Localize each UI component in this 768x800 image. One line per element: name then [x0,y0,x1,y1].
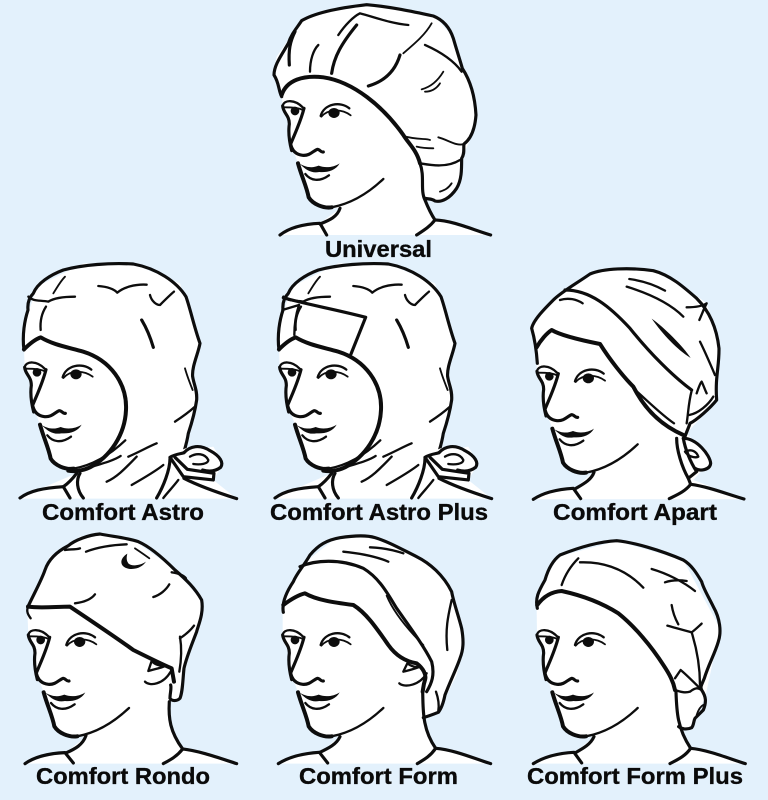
panel: Comfort Astro Plus [270,263,492,525]
illustration: Comfort Form Plus cap [533,541,745,764]
label: Universal: Universal [325,236,432,262]
panel: Comfort Form [278,536,491,789]
label: Comfort Apart: Comfort Apart [553,499,717,525]
label: Comfort Astro Plus: Comfort Astro Plus [270,499,488,525]
label: Comfort Form Plus: Comfort Form Plus [527,763,743,789]
panel: Universal [273,4,491,262]
panel: Comfort Apart [532,267,744,525]
illustration: Comfort Form cap [278,536,491,764]
illustration: Comfort Astro Plus hood with patch [275,263,492,499]
panel: Comfort Rondo [25,533,237,789]
label: Comfort Rondo: Comfort Rondo [36,763,210,789]
illustration: Universal bouffant cap [273,4,491,235]
illustration: Comfort Rondo cap [25,533,237,764]
illustration: Comfort Astro hood [20,263,237,499]
panel: Comfort Form Plus [527,541,745,789]
label: Comfort Form: Comfort Form [299,763,458,789]
panel: Comfort Astro [20,263,237,525]
label: Comfort Astro: Comfort Astro [42,499,204,525]
illustration: Comfort Apart tie cap [532,267,744,499]
